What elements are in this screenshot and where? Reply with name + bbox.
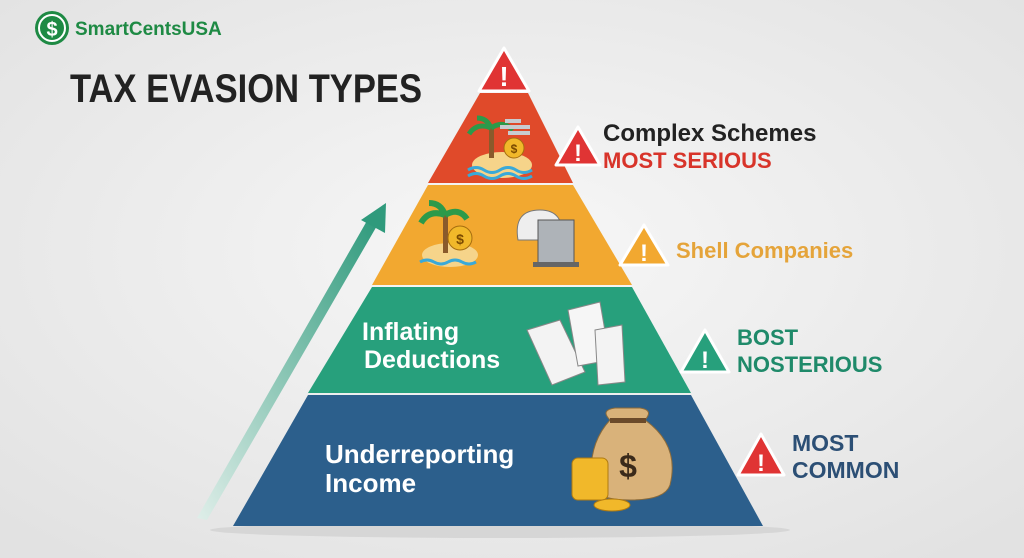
label: complex schemes: MOST SERIOUS [603, 148, 772, 173]
label: bost nosterious [681, 325, 882, 377]
text: underreporting income: Underreporting [325, 439, 514, 469]
label: most common: COMMON [792, 457, 899, 483]
tier: complex schemes (red) [428, 93, 573, 183]
label: bost nosterious: NOSTERIOUS [737, 352, 882, 377]
label: shell companies [620, 225, 853, 267]
label: bost nosterious: ! [701, 347, 709, 374]
pyramid shadow [210, 522, 790, 538]
arrow: rising severity [197, 203, 386, 520]
label: complex schemes: ! [574, 140, 582, 167]
label: complex schemes [556, 120, 816, 173]
icon: shell and building [517, 210, 579, 267]
title: TAX EVASION TYPES [70, 67, 422, 111]
icon: money bag and coins: $ [619, 448, 637, 484]
tier: underreporting income (blue) [233, 395, 763, 526]
logo: SmartCentsUSA [75, 19, 222, 40]
label: bost nosterious: BOST [737, 325, 799, 350]
tier: underreporting income (blue): Income [325, 468, 416, 498]
logo [35, 11, 222, 45]
label: complex schemes: Complex Schemes [603, 120, 816, 147]
label: most common [738, 430, 899, 483]
icon: top warning [479, 48, 529, 92]
icon: top warning: ! [499, 61, 509, 92]
label: most common: ! [757, 450, 765, 477]
logo: $ [46, 19, 58, 41]
label: shell companies: Shell Companies [676, 238, 853, 263]
tier: shell companies (orange) [372, 185, 632, 285]
icon: receipts [527, 302, 625, 385]
icon: island with coin [468, 118, 532, 178]
text: inflating deductions: Inflating [362, 318, 459, 346]
icon: island [420, 203, 478, 267]
label: most common: MOST [792, 430, 858, 456]
icon: island: $ [456, 231, 464, 247]
icon: money bag and coins [572, 408, 672, 511]
icon: island with coin: $ [511, 142, 518, 156]
tier: inflating deductions (green): Deductions [364, 346, 500, 374]
label: shell companies: ! [640, 240, 648, 267]
tier: inflating deductions (green) [308, 287, 691, 393]
